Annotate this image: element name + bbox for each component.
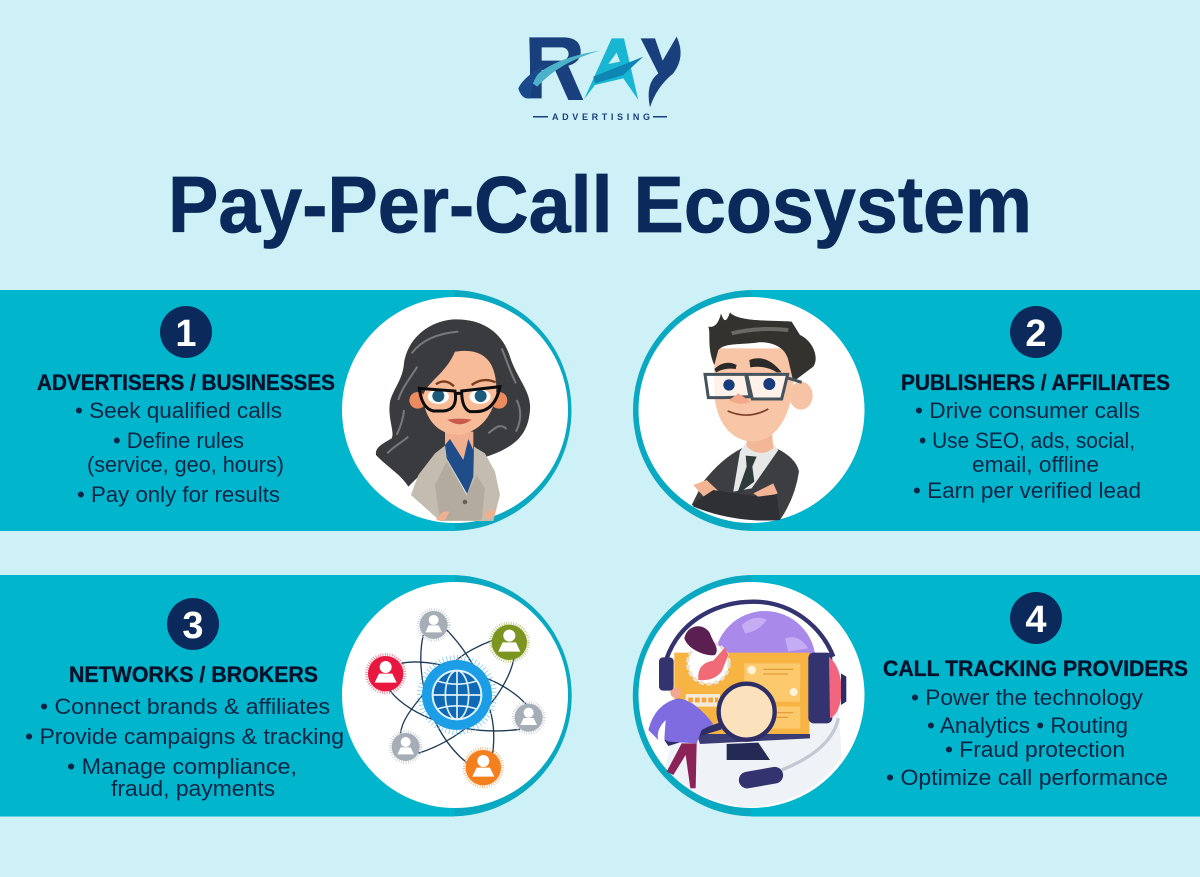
- hub: [420, 658, 494, 732]
- text block: advertisers bullets: • Pay only for results: [77, 482, 280, 507]
- text block: advertisers bullets: [75, 398, 284, 507]
- circle ring: [633, 290, 874, 531]
- white circle: [638, 582, 864, 808]
- panel background band: [0, 575, 455, 816]
- text block: networks bullets: • Manage compliance,: [67, 754, 297, 779]
- text block: networks bullets: • Connect brands & affiliates: [40, 694, 330, 719]
- heading: advertisers: ADVERTISERS / BUSINESSES: [37, 370, 335, 395]
- text block: call tracking bullets: [886, 685, 1168, 790]
- text block: publishers bullets: email, offline: [972, 452, 1099, 477]
- heading: publishers: PUBLISHERS / AFFILIATES: [901, 370, 1170, 395]
- text block: call tracking bullets: • Optimize call performance: [886, 765, 1168, 790]
- heading: networks: NETWORKS / BROKERS: [69, 662, 318, 687]
- icon: network graph: [367, 610, 544, 787]
- icon: man: [692, 312, 816, 521]
- number badge 1: [160, 306, 212, 358]
- panel: networks: [0, 575, 572, 816]
- panel: advertisers: [0, 290, 572, 531]
- text block: networks bullets: [25, 694, 344, 801]
- panel background band: [0, 290, 455, 531]
- text block: publishers bullets: • Earn per verified lead: [913, 478, 1141, 503]
- icon: woman: [376, 319, 530, 521]
- text block: call tracking bullets: • Fraud protection: [945, 737, 1125, 762]
- panel: publishers: [633, 290, 1200, 531]
- white circle: [342, 297, 568, 523]
- text block: advertisers bullets: • Seek qualified calls: [75, 398, 282, 423]
- text block: call tracking bullets: • Analytics • Routing: [927, 713, 1128, 738]
- circle ring: [633, 575, 874, 816]
- circle ring: [330, 290, 572, 531]
- text block: publishers bullets: [913, 398, 1141, 503]
- number badge 2: [1010, 306, 1062, 358]
- panel background band: [752, 575, 1200, 816]
- text block: publishers bullets: • Drive consumer calls: [915, 398, 1140, 423]
- number badge 4: [1010, 592, 1062, 644]
- circle ring: [330, 575, 572, 816]
- heading: call tracking: CALL TRACKING PROVIDERS: [883, 656, 1188, 681]
- text block: advertisers bullets: • Define rules: [113, 428, 244, 453]
- user nodes: [367, 610, 544, 787]
- logo: Ray Advertising: [518, 37, 681, 122]
- text block: networks bullets: • Provide campaigns & tracking: [25, 724, 344, 749]
- panel: call tracking: [633, 575, 1200, 816]
- text block: networks bullets: fraud, payments: [111, 776, 275, 801]
- number badge 3: [167, 598, 219, 650]
- white circle: [342, 582, 568, 808]
- white circle: [638, 297, 864, 523]
- icon: call tracking illustration: [648, 602, 846, 807]
- logo: Ray Advertising: ADVERTISING: [552, 112, 650, 122]
- number badge 3: 3: [182, 605, 204, 647]
- number badge 2: 2: [1025, 313, 1047, 355]
- number badge 4: 4: [1025, 599, 1047, 641]
- number badge 1: 1: [175, 313, 197, 355]
- panel background band: [752, 290, 1200, 531]
- title: Pay-Per-Call Ecosystem: [168, 160, 1032, 249]
- text block: advertisers bullets: (service, geo, hours): [87, 452, 284, 477]
- text block: publishers bullets: • Use SEO, ads, social,: [919, 428, 1135, 453]
- text block: call tracking bullets: • Power the technology: [911, 685, 1143, 710]
